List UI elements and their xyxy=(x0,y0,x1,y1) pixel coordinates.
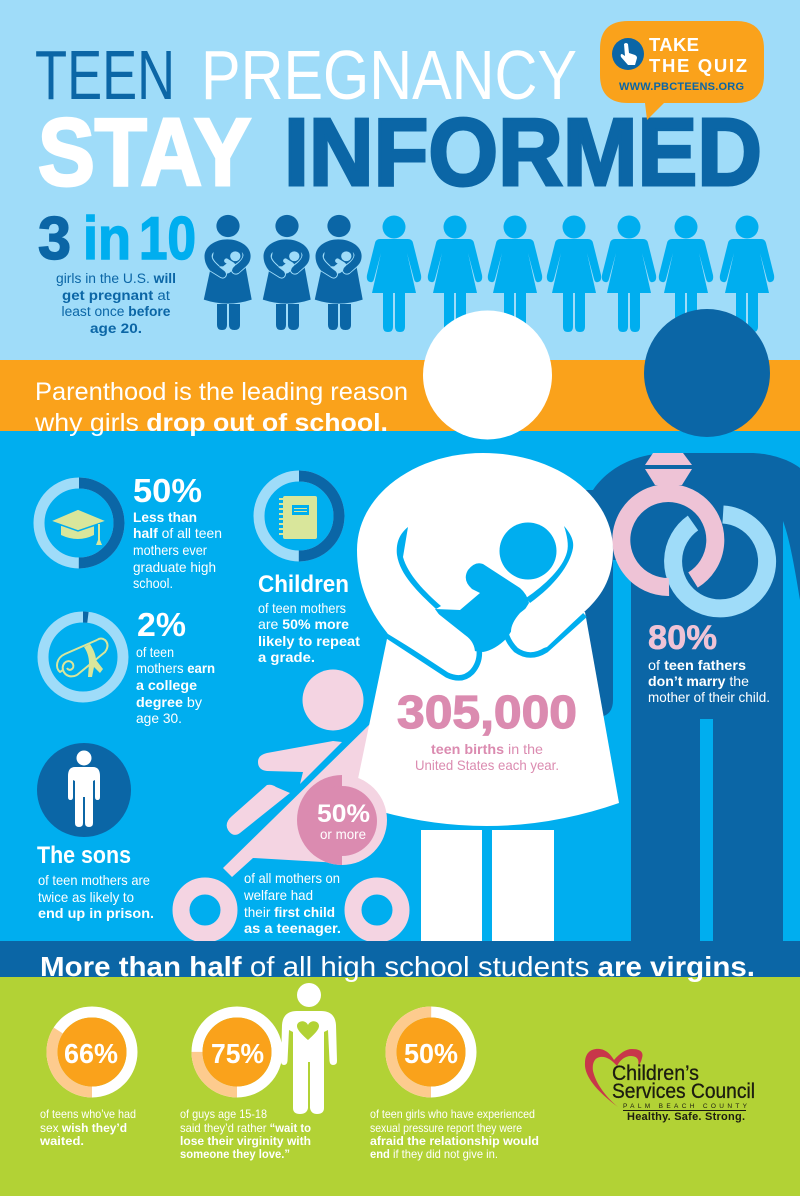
stroller frame xyxy=(223,722,380,877)
stat: 75 percent xyxy=(180,983,337,1161)
description: end up in prison. xyxy=(38,905,154,921)
donut sublabel: or more xyxy=(320,826,366,842)
father body xyxy=(570,453,800,941)
welfare description xyxy=(243,870,341,936)
stat: 50 percent relationship xyxy=(370,1012,539,1161)
description: half of all teen xyxy=(133,525,222,541)
big number xyxy=(38,205,196,272)
donut chart xyxy=(259,476,339,556)
description: of teen xyxy=(136,644,174,660)
pregnant figure 1 xyxy=(204,215,252,330)
band heading: why girls drop out of school. xyxy=(34,409,388,437)
left wheel xyxy=(181,886,229,934)
icon: boy with heart xyxy=(281,983,337,1114)
description: school. xyxy=(133,575,173,591)
births description: United States each year. xyxy=(415,757,559,773)
donut chart xyxy=(43,617,123,697)
births description xyxy=(415,741,559,773)
donut chart xyxy=(197,1012,277,1092)
background: main blue section xyxy=(0,431,800,942)
seven other figures xyxy=(367,216,774,332)
description: sexual pressure report they were xyxy=(370,1121,522,1135)
description: of guys age 15-18 xyxy=(180,1107,267,1121)
logo wordmark xyxy=(612,1062,755,1123)
stat: 3 in 10 xyxy=(38,205,196,336)
father description: mother of their child. xyxy=(648,689,770,705)
stat: the sons xyxy=(37,743,154,921)
callout: take the quiz xyxy=(600,21,764,120)
quiz text: TAKE xyxy=(649,34,699,55)
description: degree by xyxy=(136,694,202,710)
icon: boy in circle xyxy=(37,743,131,837)
background: light blue header xyxy=(0,0,800,360)
description: are 50% more xyxy=(258,616,349,632)
donut chart xyxy=(52,1012,132,1092)
births description: teen births in the xyxy=(431,741,543,757)
stroller body xyxy=(181,670,401,934)
heading: The sons xyxy=(37,842,131,869)
heading: pregnancy: PREGNANCY xyxy=(201,36,577,114)
description xyxy=(136,644,215,726)
big number: 10 xyxy=(139,205,196,272)
rings icon xyxy=(621,453,767,608)
description: least once before xyxy=(62,304,171,319)
donut label: 50% xyxy=(404,1038,458,1069)
description xyxy=(370,1107,539,1161)
icon: pointing hand xyxy=(612,38,644,70)
description: a grade. xyxy=(258,649,315,665)
description: a college xyxy=(136,677,197,693)
right wheel xyxy=(353,886,401,934)
father description xyxy=(648,657,770,705)
baby head xyxy=(302,670,364,730)
description xyxy=(180,1107,311,1161)
description: someone they love.” xyxy=(180,1147,290,1161)
heading: stay: STAY xyxy=(38,99,251,206)
description: afraid the relationship would xyxy=(370,1134,539,1148)
description: of teen mothers are xyxy=(38,872,150,888)
pregnant figure 2 xyxy=(263,215,311,330)
stroller arm xyxy=(258,741,342,784)
figure: father xyxy=(570,309,800,941)
big number: 3 xyxy=(38,205,71,272)
description: sex wish they’d xyxy=(40,1121,127,1135)
pregnant figure 3 xyxy=(315,215,363,330)
description: get pregnant at xyxy=(62,288,170,303)
father head xyxy=(644,309,770,437)
logo heart xyxy=(585,1049,643,1107)
mother with baby xyxy=(353,310,619,826)
description: girls in the U.S. will xyxy=(56,271,176,286)
logo wordmark: Services Council xyxy=(612,1080,755,1103)
donut chart xyxy=(391,1012,471,1092)
stat: 2 percent college degree xyxy=(43,606,215,726)
welfare description: welfare had xyxy=(243,887,313,903)
logo wordmark: PALM BEACH COUNTY xyxy=(623,1103,748,1110)
description: mothers ever xyxy=(133,542,207,558)
donut chart xyxy=(39,483,119,563)
description: of teen girls who have experienced xyxy=(370,1107,535,1121)
description: lose their virginity with xyxy=(180,1134,311,1148)
heading: Children xyxy=(258,571,349,598)
description: graduate high xyxy=(133,559,216,575)
quiz text xyxy=(649,34,747,76)
description: said they’d rather “wait to xyxy=(180,1121,311,1135)
description: mothers earn xyxy=(136,660,215,676)
figure: teen mother xyxy=(353,310,619,941)
band heading: More than half of all high school students are virgins. xyxy=(40,951,755,982)
stat: 50 percent or more on welfare xyxy=(243,775,387,936)
mother legs xyxy=(421,830,554,941)
band: virgins and green footer background xyxy=(0,941,800,1196)
description xyxy=(133,509,222,591)
title xyxy=(35,36,762,206)
icon: graduation cap xyxy=(50,509,107,545)
logo wordmark: Healthy. Safe. Strong. xyxy=(627,1111,745,1123)
donut label: 50% xyxy=(317,800,370,828)
description: of teens who’ve had xyxy=(40,1107,136,1121)
description: age 20. xyxy=(90,321,142,336)
stat: 50 percent graduate xyxy=(39,472,222,591)
pictogram: row of ten girls xyxy=(204,215,774,332)
description xyxy=(56,271,176,336)
logo wordmark: Children’s xyxy=(612,1062,699,1085)
description: twice as likely to xyxy=(38,889,134,905)
stat: 66 percent xyxy=(39,1012,136,1148)
stat: 80 percent: 80% xyxy=(648,619,717,657)
quiz text: THE QUIZ xyxy=(649,55,747,76)
donut label: 66% xyxy=(64,1038,118,1069)
description xyxy=(38,872,154,921)
father description: of teen fathers xyxy=(648,657,746,673)
welfare description: their first child xyxy=(244,904,335,920)
heading: informed: INFORMED xyxy=(284,99,762,206)
description: age 30. xyxy=(136,710,182,726)
description xyxy=(258,600,360,665)
band heading: Parenthood is the leading reason xyxy=(35,378,408,406)
heading: teen: TEEN xyxy=(35,36,175,114)
stat: 305,000: 305,000 xyxy=(397,686,577,738)
description xyxy=(39,1107,136,1148)
icon: notebook xyxy=(279,496,317,539)
welfare description: as a teenager. xyxy=(244,920,341,936)
stat: children repeat a grade xyxy=(258,476,360,665)
description: end if they did not give in. xyxy=(370,1147,498,1161)
quiz url: WWW.PBCTEENS.ORG xyxy=(619,81,744,93)
description: likely to repeat xyxy=(258,633,360,649)
father description: don’t marry the xyxy=(648,673,749,689)
description: Less than xyxy=(133,509,197,525)
donut label: 75% xyxy=(211,1038,264,1069)
icon: diploma xyxy=(57,638,108,677)
big number: in xyxy=(83,205,131,272)
big number: 2% xyxy=(137,606,186,643)
band: parenthood xyxy=(0,360,800,437)
band heading xyxy=(34,378,408,437)
leg gap xyxy=(700,719,713,941)
welfare description: of all mothers on xyxy=(244,870,340,886)
donut xyxy=(297,775,387,865)
logo: children's services council xyxy=(585,1049,755,1123)
description: waited. xyxy=(39,1134,84,1148)
description: of teen mothers xyxy=(258,600,346,616)
stroller leg xyxy=(227,785,290,835)
big number: 50% xyxy=(133,472,202,509)
